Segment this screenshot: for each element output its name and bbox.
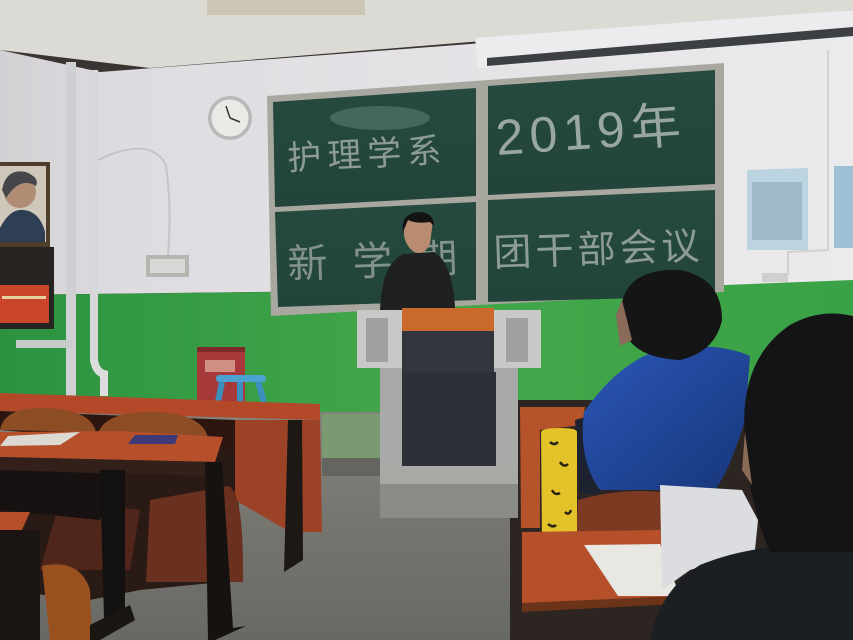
chalk text: 新学期: 新学期 — [287, 236, 483, 287]
top left panel — [273, 88, 476, 207]
speaker — [380, 212, 455, 312]
lower green wall — [0, 280, 853, 430]
dark area under right desks — [510, 400, 853, 640]
chalk text: 护理学系: 护理学系 — [286, 132, 448, 178]
wall posters — [747, 166, 853, 250]
white paper on desk — [0, 432, 80, 446]
chalk glare — [330, 106, 430, 130]
right back desk — [520, 407, 585, 528]
wall socket and wire — [762, 50, 828, 282]
nearest left desk and chair — [0, 512, 135, 640]
chalkboard — [267, 63, 724, 316]
phone on desk — [128, 435, 178, 444]
podium — [357, 308, 541, 518]
ceiling — [0, 0, 853, 68]
wall — [0, 12, 853, 295]
dark area under left desks — [0, 440, 243, 600]
top right panel — [488, 70, 715, 195]
chalk text: 2019年: 2019年 — [494, 97, 689, 166]
red fire box — [197, 347, 245, 401]
yellow patterned bottle — [541, 428, 577, 552]
student in blue jacket — [575, 270, 750, 494]
floor — [0, 395, 540, 640]
wall switch box — [146, 255, 189, 277]
notice board — [0, 247, 54, 329]
wall pipes — [16, 62, 170, 396]
left chairs — [0, 408, 243, 582]
chalk text: 团干部会议: 团干部会议 — [493, 226, 704, 275]
bottom right panel — [488, 190, 715, 302]
framed portrait — [0, 162, 50, 247]
chair back right — [576, 491, 662, 536]
podium top — [357, 308, 541, 372]
right front desk — [522, 530, 678, 612]
ceiling light fixture — [207, 0, 365, 15]
bottom left panel — [275, 202, 476, 307]
left front desk — [0, 431, 246, 640]
blue stool — [216, 375, 266, 402]
papers on desk — [584, 485, 758, 596]
air vent — [475, 10, 853, 68]
student in foreground — [650, 313, 853, 640]
left back desk — [0, 393, 322, 572]
wall clock — [208, 96, 252, 140]
